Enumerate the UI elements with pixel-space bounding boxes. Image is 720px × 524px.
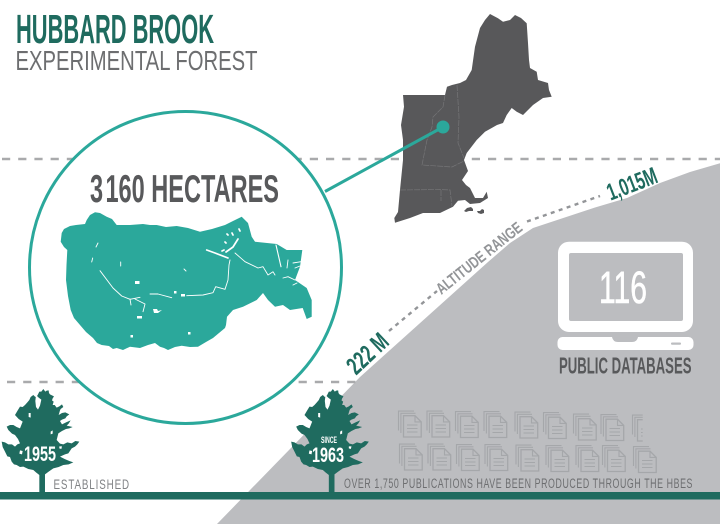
icon: laptop with database count <box>558 242 694 350</box>
heading: Hubbard Brook: HUBBARD BROOK <box>16 6 214 52</box>
dashed altitude line: upper <box>2 158 720 160</box>
label: established: ESTABLISHED <box>54 477 130 492</box>
title <box>16 6 258 76</box>
connector line from circle to map dot <box>325 120 450 192</box>
tree: since 1963 <box>291 389 369 492</box>
ground bar <box>0 492 720 500</box>
number: 116: 116 <box>599 262 647 313</box>
publications document icons <box>398 411 656 472</box>
label: 222 m: 222 M <box>341 328 395 380</box>
forest shape <box>61 212 312 350</box>
year: 1955: 1955 <box>24 443 56 466</box>
laptop base <box>558 337 694 350</box>
label: 1,015 m: 1,015M <box>603 163 661 206</box>
state borders <box>400 85 464 206</box>
altitude range annotation <box>341 163 661 380</box>
subheading: Experimental Forest: EXPERIMENTAL FOREST <box>16 45 258 76</box>
slope: grey mountain area <box>217 163 720 524</box>
circle panel: forest area <box>30 112 342 424</box>
tree: established 1955 <box>2 389 79 492</box>
dashed altitude line: lower <box>7 381 356 383</box>
map states silhouette <box>394 14 552 223</box>
label: altitude range: ALTITUDE RANGE <box>433 219 526 298</box>
streams <box>92 229 301 312</box>
dotted altitude line <box>389 196 600 331</box>
heading: 3160 hectares: 3 160 HECTARES <box>90 168 279 211</box>
location dot <box>436 120 450 134</box>
year: 1963: 1963 <box>312 444 344 467</box>
small ponds <box>130 281 190 338</box>
map: New England <box>394 14 552 223</box>
label: since: SINCE <box>321 435 337 445</box>
map islands <box>464 207 484 214</box>
